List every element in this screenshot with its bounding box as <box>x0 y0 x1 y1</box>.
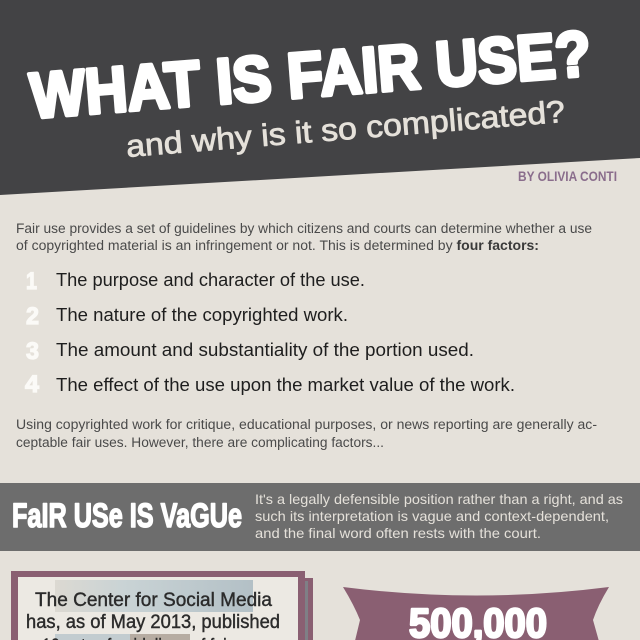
panel: header <box>0 0 640 195</box>
intro paragraph: Fair use provides a set of guidelines by which citizens and courts can determine whether a use <box>16 221 592 236</box>
closing paragraph: Using copyrighted work for critique, educational purposes, or news reporting are generally ac- <box>16 417 597 432</box>
factor 4 <box>25 371 515 398</box>
faded background image <box>55 580 253 640</box>
closing paragraph: ceptable fair uses. However, there are complicating factors... <box>16 435 384 450</box>
band description: It's a legally defensible position rather than a right, and as <box>255 491 623 507</box>
factor 1 <box>26 268 365 295</box>
band heading: FaIR USe IS VaGUe <box>12 497 242 535</box>
factor 4: The effect of the use upon the market value of the work. <box>56 375 515 395</box>
byline: BY OLIVIA CONTI <box>518 168 617 184</box>
panel: fair use is vague band <box>0 483 640 551</box>
factor 2: 2 <box>26 303 39 330</box>
card text: The Center for Social Media <box>35 590 272 611</box>
factor 3: The amount and substantiality of the portion used. <box>56 340 474 360</box>
factor 1: 1 <box>26 268 37 295</box>
factor 4: 4 <box>25 371 40 398</box>
factor 3 <box>26 338 474 365</box>
factor 1: The purpose and character of the use. <box>56 270 365 290</box>
subtitle: and why is it so complicated? <box>125 94 566 164</box>
intro paragraph: of copyrighted material is an infringement or not. This is determined by four factors: <box>16 238 539 253</box>
band description <box>255 491 623 541</box>
factor 2 <box>26 303 348 330</box>
factor 2: The nature of the copyrighted work. <box>56 305 348 325</box>
factor 3: 3 <box>26 338 39 365</box>
card text: has, as of May 2013, published <box>26 612 280 633</box>
list: four factors <box>25 268 515 398</box>
panel: center for social media card <box>11 571 313 640</box>
intro paragraph <box>16 221 592 253</box>
band description: and the final word often rests with the court. <box>255 525 541 541</box>
title: WHAT IS FAIR USE? <box>28 17 593 132</box>
closing paragraph <box>16 417 597 450</box>
band description: such its interpretation is vague and context-dependent, <box>255 508 609 524</box>
card text <box>26 590 280 640</box>
panel: statistic ribbon <box>343 587 609 640</box>
